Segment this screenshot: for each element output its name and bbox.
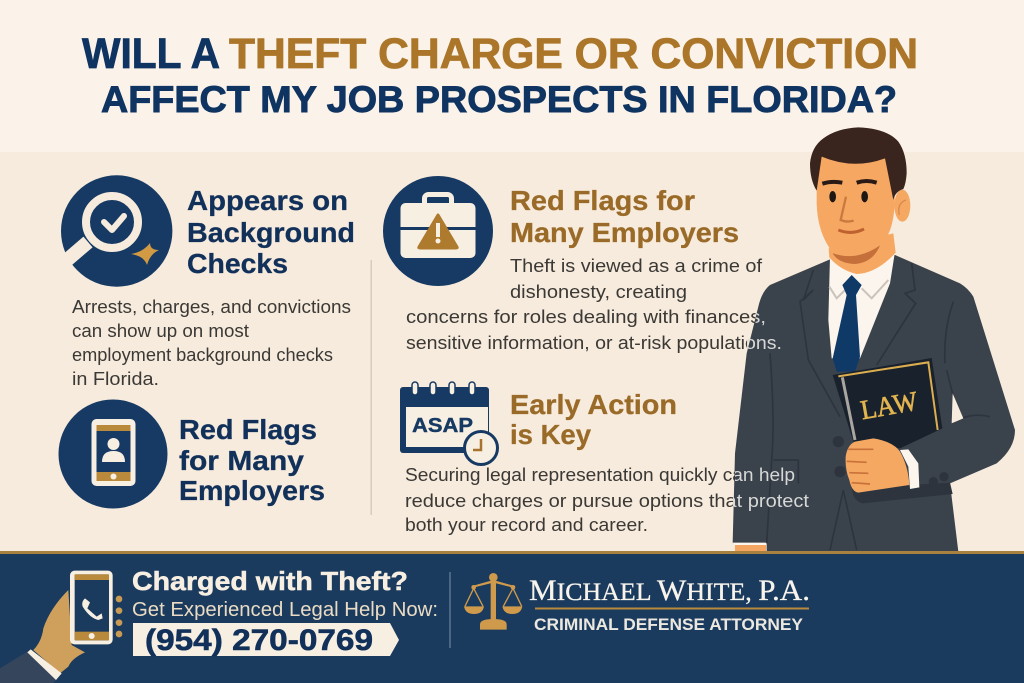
neck shadow bbox=[833, 244, 881, 264]
header background bbox=[0, 0, 1024, 152]
text: dishonesty description: Theft is viewed as a crime of bbox=[510, 256, 763, 276]
content panel background bbox=[0, 152, 1024, 552]
heading: early action is key bbox=[510, 389, 677, 450]
illustration: attorney holding law book bbox=[733, 127, 1015, 552]
text: dishonesty description bbox=[406, 256, 782, 353]
hand bbox=[846, 438, 909, 493]
icon: scales of justice bbox=[464, 573, 522, 630]
icon: ASAP calendar with clock bbox=[400, 382, 498, 464]
shirt cuff bbox=[900, 449, 919, 489]
heading: red flags for many employers left: Employers bbox=[179, 475, 325, 506]
phone number banner: (954) 270-0769 bbox=[145, 624, 373, 657]
gap between arm and torso bbox=[952, 393, 963, 423]
collar fold lines bbox=[829, 280, 888, 298]
heading: red flags for many employers left: for Many bbox=[179, 445, 304, 476]
footer band bbox=[0, 551, 1024, 683]
heading: appears on background checks: Background bbox=[187, 217, 355, 248]
text: background check description: employment background checks bbox=[72, 345, 333, 365]
icon: hand holding phone bbox=[0, 571, 122, 683]
call to action text: Charged with Theft? bbox=[132, 566, 408, 596]
jacket buttons bbox=[833, 436, 949, 486]
heading: appears on background checks: Appears on bbox=[187, 185, 348, 216]
mouth bbox=[838, 229, 864, 232]
face bbox=[817, 150, 895, 256]
suit bbox=[733, 255, 1015, 552]
icon: magnifying glass with check bbox=[60, 175, 172, 287]
heading: red flags for many employers left bbox=[179, 414, 325, 506]
neck bbox=[829, 233, 896, 274]
heading: appears on background checks bbox=[187, 185, 355, 279]
suit lapel and seam lines bbox=[767, 263, 990, 550]
left shirt cuff bbox=[734, 542, 767, 545]
heading: early action is key: is Key bbox=[510, 419, 591, 450]
heading: red flags for many employers right: Many Employers bbox=[510, 217, 739, 248]
icon: ASAP calendar with clock: ASAP bbox=[412, 415, 473, 437]
law book bbox=[833, 358, 942, 448]
finger lines bbox=[847, 449, 873, 484]
eyes bbox=[829, 191, 868, 202]
title: AFFECT MY JOB PROSPECTS IN FLORIDA? bbox=[101, 79, 897, 120]
sleeve shadow bbox=[852, 483, 953, 503]
title: THEFT CHARGE OR CONVICTION bbox=[229, 31, 918, 78]
heading: red flags for many employers left: Red Flags bbox=[179, 414, 317, 445]
tie bbox=[833, 275, 862, 372]
hair bbox=[810, 127, 907, 200]
icon: phone with profile bbox=[58, 400, 168, 508]
heading: red flags for many employers right: Red Flags for bbox=[510, 185, 695, 216]
firm name bbox=[529, 574, 810, 634]
text: dishonesty description: dishonesty, creating bbox=[510, 282, 687, 302]
firm name: MICHAEL WHITE, P.A. bbox=[529, 574, 810, 607]
footer divider bbox=[449, 572, 451, 648]
text: early action description: reduce charges or pursue options that protect bbox=[405, 491, 809, 511]
firm name: CRIMINAL DEFENSE ATTORNEY bbox=[534, 616, 803, 634]
ear bbox=[894, 190, 910, 222]
text: background check description: can show up on most bbox=[72, 321, 249, 341]
shirt bbox=[828, 252, 895, 358]
text: background check description bbox=[72, 297, 351, 389]
icon: briefcase with warning bbox=[383, 176, 493, 286]
heading: early action is key: Early Action bbox=[510, 389, 677, 420]
text: dishonesty description: sensitive information, or at-risk populations. bbox=[406, 333, 782, 353]
text: early action description bbox=[405, 465, 809, 535]
left hand at bottom bbox=[735, 545, 766, 552]
text: background check description: Arrests, charges, and convictions bbox=[72, 297, 351, 317]
law book: LAW bbox=[858, 386, 920, 425]
text: dishonesty description: concerns for roles dealing with finances, bbox=[406, 307, 766, 327]
title bbox=[82, 31, 918, 120]
heading: appears on background checks: Checks bbox=[187, 248, 288, 279]
column divider bbox=[370, 260, 372, 515]
title: WILL A bbox=[82, 31, 220, 78]
call to action text bbox=[132, 566, 438, 621]
text: early action description: Securing legal representation quickly can help bbox=[405, 465, 795, 485]
text: background check description: in Florida. bbox=[72, 369, 159, 389]
text: early action description: both your record and career. bbox=[405, 515, 648, 535]
eyebrows bbox=[822, 181, 877, 184]
call to action text: Get Experienced Legal Help Now: bbox=[132, 599, 438, 621]
nose bbox=[841, 197, 854, 222]
heading: red flags for many employers right bbox=[510, 185, 739, 248]
